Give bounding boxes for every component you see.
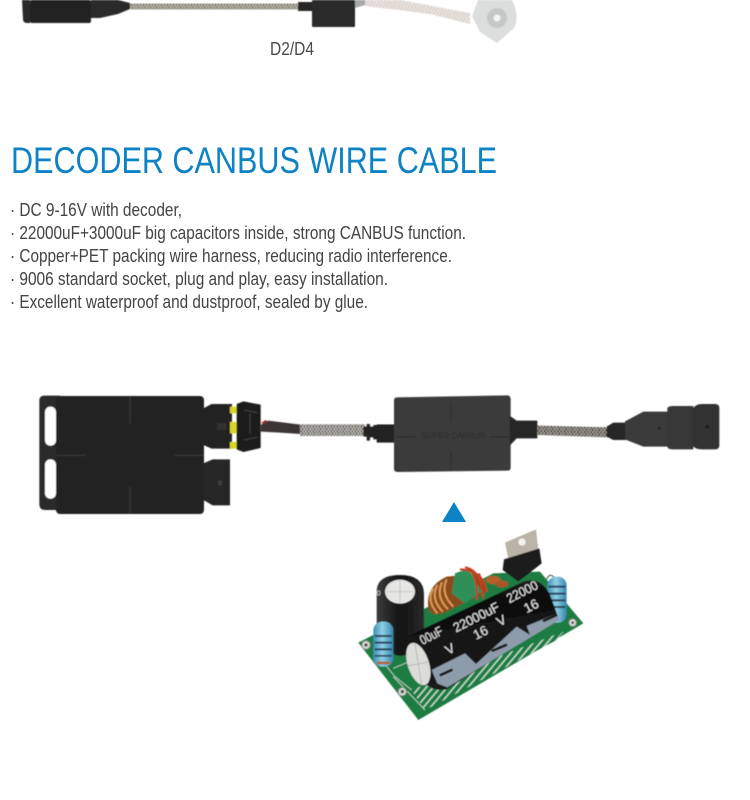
red wire and sleeve — [261, 420, 268, 425]
feature: capacitors: · 22000uF+3000uF big capacitors inside, strong CANBUS function. — [10, 223, 466, 243]
label: D2/D4: D2/D4 — [270, 39, 314, 59]
marking: volt unit left: V — [443, 640, 457, 658]
marking: rated capacitance: 22000uF — [451, 599, 502, 635]
module marking: SUPER CANBUS — [422, 432, 485, 441]
9006 plug — [625, 412, 672, 447]
module box — [394, 395, 511, 472]
capacitor sleeve band — [432, 613, 559, 687]
mounting bracket — [39, 396, 60, 510]
capacitor end cap — [401, 640, 435, 688]
photo: inline module with 9006 plug — [377, 395, 719, 472]
marking: cropped capacitance: 00uF — [417, 623, 445, 648]
orange small parts — [486, 576, 501, 584]
photo: capacitor circuit board — [358, 529, 583, 720]
small capacitor marking: 0 — [377, 588, 381, 597]
decoder box body — [56, 396, 204, 514]
silk-screen hatch — [412, 632, 563, 710]
marking: rated capacitance repeat: 22000 — [504, 578, 540, 606]
feature: socket: · 9006 standard socket, plug and play, easy installation. — [10, 269, 388, 289]
large capacitor body — [405, 580, 559, 690]
title: DECODER CANBUS WIRE CABLE — [11, 140, 497, 181]
capacitor markings — [417, 578, 541, 658]
copper coil — [428, 567, 487, 614]
left resistor — [373, 622, 393, 667]
feature: waterproof: · Excellent waterproof and dustproof, sealed by glue. — [10, 292, 368, 312]
feature list — [10, 200, 466, 312]
marking: voltage: 16 — [471, 623, 491, 643]
strain relief and braid — [510, 416, 537, 445]
icon: blue up arrow — [442, 502, 466, 522]
right resistor — [547, 575, 567, 623]
marking: voltage repeat: 16 — [521, 596, 541, 616]
green circuit board — [358, 572, 583, 720]
feature: wire harness: · Copper+PET packing wire harness, reducing radio interference. — [10, 246, 452, 266]
mounting holes — [362, 619, 577, 696]
photo: decoder box with connectors — [39, 396, 397, 514]
side socket — [203, 459, 230, 505]
waterproof connector — [203, 404, 232, 449]
photo: top cable cropped at the page edge — [22, 0, 517, 43]
feature: voltage: · DC 9-16V with decoder, — [10, 200, 182, 220]
small capacitor — [377, 575, 424, 656]
marking: volt unit right: V — [494, 612, 509, 629]
TO-220 regulator — [505, 529, 538, 559]
